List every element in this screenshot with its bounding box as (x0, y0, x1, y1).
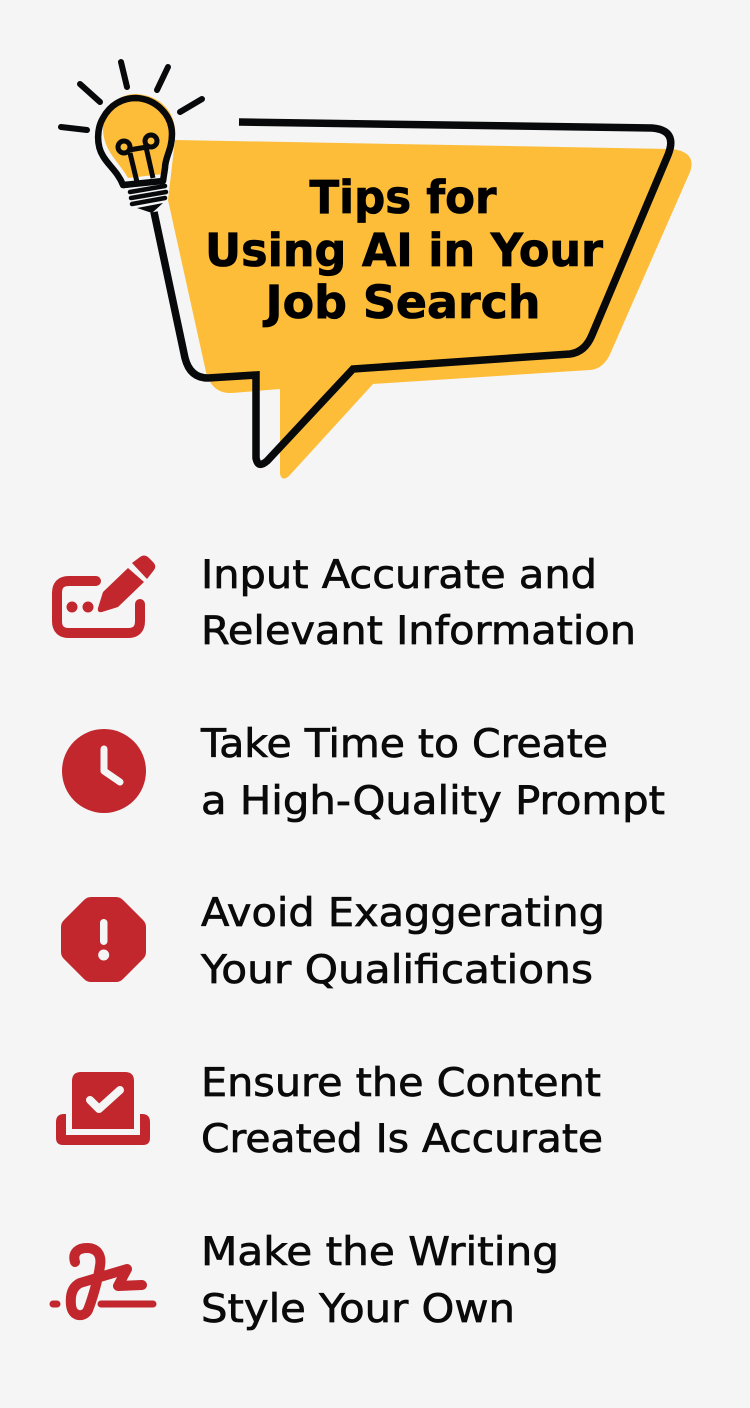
bulb outline (98, 98, 172, 185)
text: tip 4 (201, 1061, 603, 1162)
bulb yellow fill (103, 94, 175, 178)
tip 4 (56, 1061, 603, 1162)
bubble yellow fill (168, 140, 692, 479)
icon: clock (62, 729, 146, 813)
text: tip 2 (200, 722, 665, 824)
filament (118, 135, 157, 182)
text: tip 3: Avoid Exaggerating (201, 891, 605, 936)
bubble black outline (154, 122, 671, 464)
text: tip 5 (201, 1230, 559, 1332)
icon: light bulb (61, 62, 202, 213)
bulb screw base (124, 180, 166, 204)
tip 1 (57, 553, 636, 654)
text: tip 5: Make the Writing (201, 1230, 559, 1275)
tip 5 (53, 1230, 559, 1332)
title: Using AI in Your (205, 224, 604, 277)
text: tip 3: Your Qualifications (200, 948, 593, 993)
text: tip 3 (200, 891, 605, 993)
text: tip 2: Take Time to Create (200, 722, 608, 767)
icon: signature (53, 1248, 153, 1315)
speech bubble header (61, 62, 692, 479)
icon: warning octagon (61, 897, 146, 982)
icon: pencil on input box (57, 556, 155, 633)
text: tip 2: a High-Quality Prompt (201, 779, 665, 824)
tip 3 (61, 891, 605, 993)
text: tip 1: Input Accurate and (201, 553, 597, 598)
title: Tips for (310, 171, 497, 224)
icon: checked tray (56, 1072, 150, 1145)
title: Job Search (262, 276, 540, 329)
text: tip 4: Ensure the Content (201, 1061, 601, 1106)
text: tip 1: Relevant Information (201, 609, 636, 654)
light rays (61, 62, 202, 130)
text: tip 5: Style Your Own (201, 1287, 515, 1332)
title (205, 171, 604, 329)
text: tip 4: Created Is Accurate (201, 1117, 603, 1162)
text: tip 1 (201, 553, 636, 654)
tip 2 (62, 722, 665, 824)
